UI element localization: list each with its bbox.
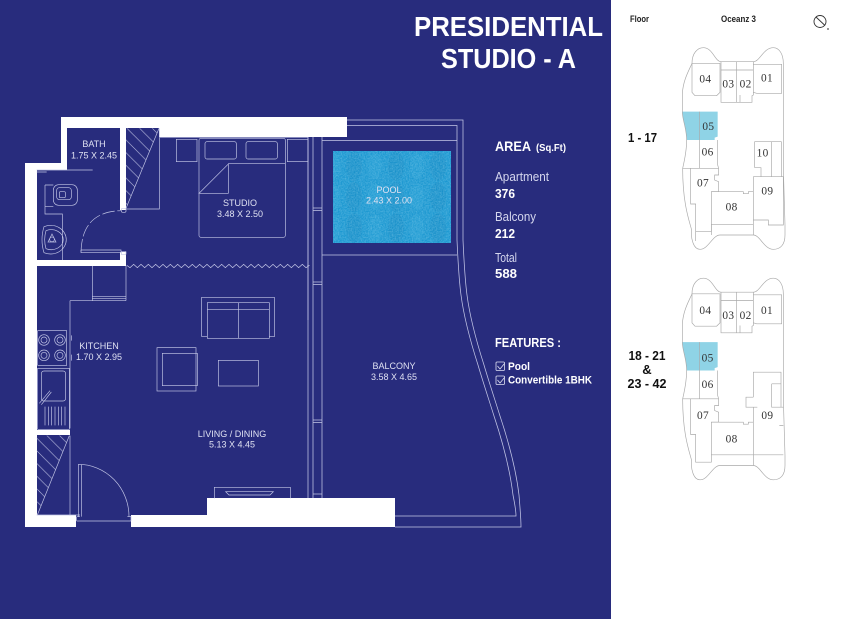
pool — [333, 151, 451, 243]
room labels: 2.43 X 2.00 — [366, 196, 412, 206]
room labels: BATH — [82, 139, 106, 149]
icon: compass — [814, 16, 829, 29]
key plan: floors 1-17: 09 — [761, 185, 773, 197]
title: PRESIDENTIAL — [414, 11, 603, 42]
highlighted unit 05 — [682, 342, 718, 370]
room labels: 1.75 X 2.45 — [71, 150, 117, 160]
folding partition — [127, 264, 309, 268]
key plan: floors 18-42: 06 — [702, 379, 714, 391]
floor range 18-21 and 23-42: 23 - 42 — [628, 376, 666, 391]
key plan: floors 1-17: 05 — [702, 121, 714, 133]
key plan: floors 1-17: 01 — [761, 73, 773, 85]
key plan: floors 1-17: 02 — [740, 79, 752, 91]
key plan: floors 1-17: 04 — [699, 73, 711, 85]
stove — [38, 331, 67, 365]
area block: Total — [495, 250, 517, 265]
area block: Apartment — [495, 169, 549, 184]
lower fixtures: kitchen, living furniture, entry — [37, 320, 290, 521]
key plan: floors 18-42: 08 — [726, 433, 738, 445]
area block: 376 — [495, 187, 515, 201]
bed — [199, 138, 285, 237]
floor range 1-17: 1 - 17 — [628, 130, 657, 145]
title: STUDIO - A — [441, 43, 576, 74]
armchair — [157, 348, 197, 391]
floor range 18-21 and 23-42 — [628, 348, 666, 391]
features block: Pool — [508, 361, 530, 373]
key plan: floors 1-17 — [682, 48, 785, 249]
key plan: floors 18-42 — [682, 278, 785, 480]
key plan: floors 1-17: 06 — [702, 147, 714, 159]
key plan: floors 1-17: 08 — [726, 201, 738, 213]
basin — [42, 225, 66, 254]
room labels: LIVING / DINING — [198, 429, 266, 439]
title — [414, 11, 603, 74]
key plan headings: Floor — [630, 14, 649, 24]
area heading: AREA — [495, 138, 531, 154]
bath door — [81, 211, 121, 252]
key plan: floors 18-42: 01 — [761, 305, 773, 317]
kitchen cabinet — [70, 266, 126, 320]
key plan: floors 18-42: 09 — [761, 410, 773, 422]
coffee table — [218, 360, 258, 386]
floor plan — [25, 117, 521, 527]
room labels — [71, 139, 417, 450]
floor range 18-21 and 23-42: 18 - 21 — [628, 348, 666, 363]
key plan: floors 18-42: 07 — [697, 410, 709, 422]
area block: (Sq.Ft) — [536, 142, 566, 154]
room labels: BALCONY — [372, 361, 416, 371]
room labels: 1.70 X 2.95 — [76, 352, 122, 362]
key plan: floors 1-17: 03 — [722, 79, 734, 91]
balcony outline — [308, 120, 521, 527]
room labels: 5.13 X 4.45 — [209, 440, 255, 450]
hatch — [37, 436, 69, 515]
key plan: floors 1-17: 07 — [697, 178, 709, 190]
entry door — [77, 464, 131, 521]
navy background panel — [0, 0, 611, 619]
hatch — [126, 128, 159, 209]
upper fixtures: bath, hatch and studio furniture — [37, 128, 309, 338]
highlighted unit 05 — [682, 112, 718, 140]
area block: 212 — [495, 227, 515, 241]
room labels: STUDIO — [223, 198, 257, 208]
floor range 18-21 and 23-42: & — [642, 362, 652, 377]
area block: 588 — [495, 267, 517, 281]
icon: checkbox — [496, 376, 504, 384]
key plan: floors 18-42: 05 — [702, 352, 714, 364]
room labels: POOL — [376, 185, 402, 195]
sofa — [202, 297, 274, 338]
room labels: KITCHEN — [79, 341, 119, 351]
features block — [495, 335, 592, 386]
features block: Convertible 1BHK — [508, 374, 592, 386]
key plan: floors 1-17: 10 — [757, 147, 769, 159]
icon: checkbox — [496, 362, 504, 370]
key plan: floors 18-42: 03 — [722, 310, 734, 322]
area block: Balcony — [495, 209, 536, 224]
area block — [495, 138, 566, 281]
tv unit — [214, 487, 290, 498]
room labels: 3.48 X 2.50 — [217, 209, 263, 219]
key plan headings: Oceanz 3 — [721, 14, 756, 24]
key plan headings — [630, 14, 756, 24]
sink — [38, 368, 69, 429]
features block: FEATURES : — [495, 335, 561, 350]
nightstands — [176, 139, 197, 162]
room labels: 3.58 X 4.65 — [371, 372, 417, 382]
key plan: floors 18-42: 02 — [740, 310, 752, 322]
key plan: floors 18-42: 04 — [699, 305, 711, 317]
walls — [25, 117, 395, 527]
toilet — [45, 185, 77, 207]
